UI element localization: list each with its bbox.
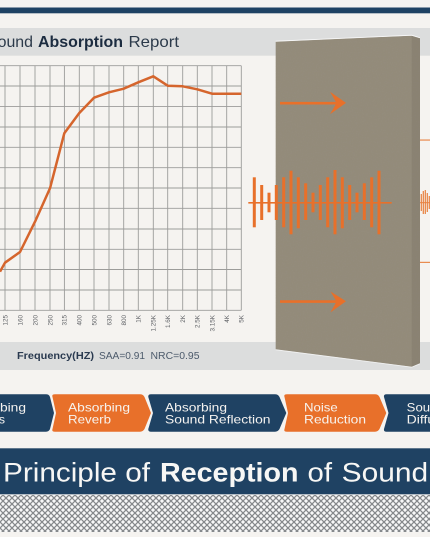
- header band: report title: [0, 28, 430, 56]
- line chart: absorption by frequency: [0, 66, 246, 331]
- frequency axis labels: 5K: [239, 314, 246, 323]
- footer band: frequency and ratings: [0, 342, 430, 370]
- banner title text: Sound: [342, 458, 428, 488]
- banner title text: Principle of: [3, 458, 151, 488]
- frequency axis labels: [2, 314, 246, 331]
- process step: noise reduction: [284, 394, 386, 432]
- process step: absorbing reverb: Reverb: [68, 412, 111, 426]
- frequency axis labels: 315: [62, 315, 69, 326]
- banner title text: Reception: [160, 458, 298, 488]
- heading: sound absorption report: Absorption: [38, 34, 123, 51]
- top navy bar: [0, 8, 430, 13]
- frequency axis labels: 1.6K: [165, 314, 172, 328]
- frequency axis labels: 250: [47, 315, 54, 326]
- title banner: [0, 448, 430, 494]
- frequency axis labels: 125: [2, 315, 9, 326]
- process step: absorbing (cropped): [0, 394, 54, 432]
- frequency axis labels: 4K: [224, 314, 231, 323]
- heading: sound absorption report: Report: [128, 34, 180, 51]
- frequency axis labels: 630: [106, 315, 113, 326]
- mesh pattern strip: [0, 495, 430, 532]
- transmitted sound: small waveform and lines: [420, 140, 430, 263]
- frequency axis labels: 500: [91, 315, 98, 326]
- frequency axis labels: 2.5K: [195, 314, 202, 328]
- frequency axis labels: 160: [17, 315, 24, 326]
- process step: sound diffusion (cropped): [384, 394, 430, 432]
- frequency caption: Frequency(HZ): [17, 351, 94, 362]
- process step: absorbing sound reflection: [148, 394, 286, 432]
- process step: absorbing reverb: Absorbing: [68, 401, 130, 415]
- frequency caption: NRC=0.95: [150, 351, 200, 362]
- frequency axis labels: 800: [121, 315, 128, 326]
- frequency axis labels: 200: [32, 315, 39, 326]
- frequency axis labels: 400: [77, 315, 84, 326]
- banner title text: of: [308, 458, 333, 488]
- absorption curve: [0, 76, 241, 272]
- arrow: lower incoming sound: [280, 292, 346, 312]
- frequency caption: SAA=0.91: [99, 351, 145, 362]
- process step: absorbing reverb: [52, 394, 151, 432]
- process step: noise reduction: Noise: [304, 401, 338, 415]
- frequency axis labels: 1K: [136, 314, 143, 323]
- frequency axis labels: 2K: [180, 314, 187, 323]
- frequency axis labels: 3.15K: [209, 314, 216, 331]
- process step: noise reduction: Reduction: [304, 412, 366, 426]
- sound waveform: [248, 170, 392, 234]
- acoustic panel: [276, 35, 420, 367]
- arrow: upper incoming sound: [280, 92, 346, 114]
- frequency axis labels: 1.25K: [151, 314, 158, 331]
- process step: absorbing sound reflection: Absorbing: [165, 401, 227, 415]
- process step: absorbing sound reflection: Sound Reflection: [165, 412, 270, 426]
